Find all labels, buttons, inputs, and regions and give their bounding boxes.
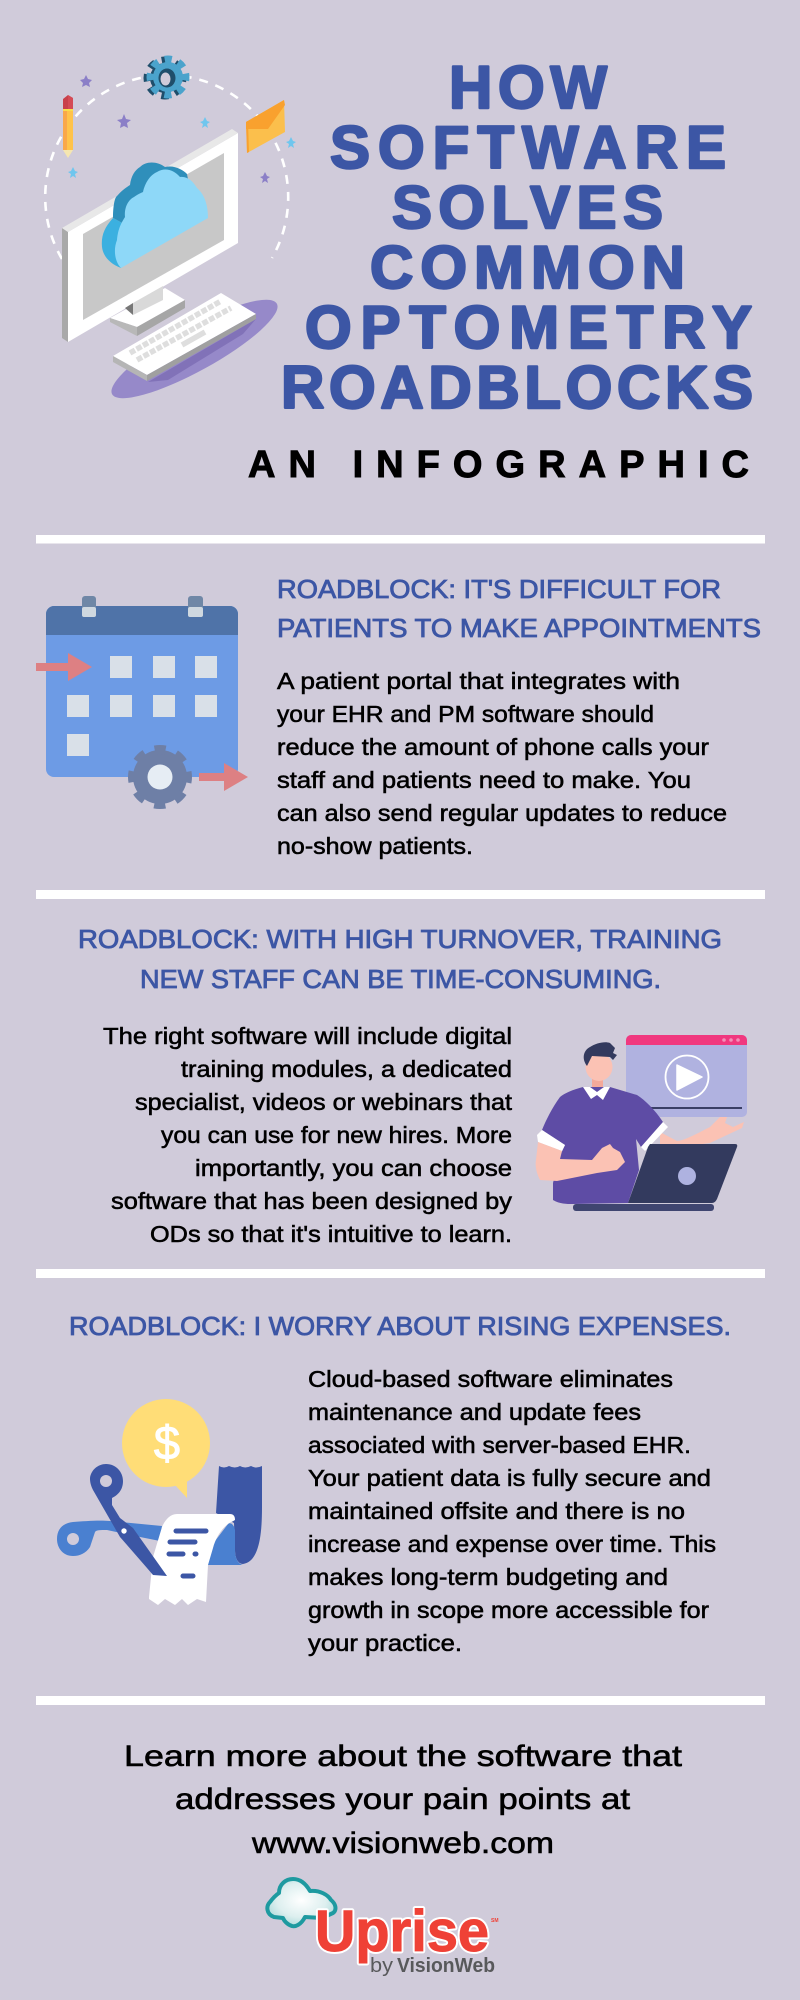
- text block: [103, 1023, 513, 1247]
- title: HOW: [449, 54, 607, 121]
- lower scissor handle: [57, 1521, 162, 1556]
- icon: pencil: [63, 95, 73, 158]
- text block: your practice.: [308, 1630, 462, 1656]
- text block: reduce the amount of phone calls your: [277, 734, 709, 760]
- speech bubble with dollar: [122, 1399, 210, 1498]
- text block: you can use for new hires. More: [161, 1122, 512, 1148]
- text block: growth in scope more accessible for: [308, 1597, 709, 1623]
- byline: VisionWeb: [397, 1955, 495, 1977]
- text block: Your patient data is fully secure and: [308, 1465, 711, 1491]
- text block: The right software will include digital: [103, 1023, 512, 1049]
- call to action: www.visionweb.com: [251, 1827, 554, 1860]
- logo: Uprise by VisionWeb: [267, 1879, 498, 1977]
- icon: envelope: [246, 100, 285, 153]
- text block: your EHR and PM software should: [277, 701, 654, 727]
- stars: [68, 75, 296, 183]
- heading: PATIENTS TO MAKE APPOINTMENTS: [277, 613, 761, 643]
- call to action: [124, 1740, 683, 1860]
- text block: increase and expense over time. This: [308, 1531, 716, 1557]
- title: ROADBLOCKS: [281, 354, 753, 421]
- purple ellipse shadow: [102, 284, 287, 414]
- title: OPTOMETRY: [305, 294, 752, 361]
- illustration: scissors cutting receipt: [57, 1399, 262, 1605]
- upper scissor: [90, 1464, 167, 1576]
- text block: specialist, videos or webinars that: [135, 1089, 513, 1115]
- byline: by: [370, 1955, 393, 1977]
- text block: A patient portal that integrates with: [277, 668, 680, 694]
- keyboard: [113, 293, 256, 381]
- text block: [308, 1366, 716, 1656]
- service mark: SM: [491, 1918, 498, 1924]
- subtitle: AN INFOGRAPHIC: [248, 444, 749, 486]
- video window: [626, 1035, 747, 1117]
- heading: ROADBLOCK: WITH HIGH TURNOVER, TRAINING: [78, 924, 722, 954]
- icon: gear: [128, 745, 192, 809]
- text block: maintenance and update fees: [308, 1399, 641, 1425]
- icon: cloud: [102, 162, 208, 268]
- hair: [584, 1042, 617, 1066]
- heading: ROADBLOCK: IT'S DIFFICULT FOR: [277, 574, 721, 604]
- wordmark: Uprise: [315, 1899, 489, 1964]
- text block: associated with server-based EHR.: [308, 1432, 691, 1458]
- call to action: addresses your pain points at: [175, 1783, 631, 1816]
- heading: NEW STAFF CAN BE TIME-CONSUMING.: [140, 964, 661, 994]
- laptop: [628, 1144, 737, 1203]
- dashed orbit: [45, 75, 288, 259]
- monitor: [62, 129, 238, 342]
- left arm: [536, 1142, 625, 1181]
- illustration: cloud computer: [45, 56, 296, 414]
- icon: calendar: [36, 596, 248, 809]
- stand: [110, 288, 185, 336]
- icon: cloud: [267, 1879, 335, 1926]
- text block: can also send regular updates to reduce: [277, 800, 727, 826]
- text block: training modules, a dedicated: [181, 1056, 512, 1082]
- title: SOLVES: [392, 174, 663, 241]
- ribbon: [216, 1466, 262, 1564]
- panel: expenses: [57, 1311, 731, 1656]
- text block: makes long-term budgeting and: [308, 1564, 668, 1590]
- title: COMMON: [370, 234, 685, 301]
- call to action: Learn more about the software that: [124, 1740, 683, 1773]
- arrow: out: [199, 763, 248, 791]
- title: [281, 54, 753, 421]
- arrow: in: [36, 653, 92, 681]
- heading: [277, 574, 761, 643]
- heading: [78, 924, 722, 994]
- text block: no-show patients.: [277, 833, 473, 859]
- text block: ODs so that it's intuitive to learn.: [150, 1221, 512, 1247]
- title: SOFTWARE: [330, 114, 726, 181]
- text block: software that has been designed by: [111, 1188, 513, 1214]
- speech bubble with dollar: $: [154, 1416, 180, 1469]
- right arm: [660, 1117, 744, 1150]
- neck and head: [592, 1075, 603, 1088]
- text block: staff and patients need to make. You: [277, 767, 691, 793]
- text block: Cloud-based software eliminates: [308, 1366, 673, 1392]
- shirt: [542, 1087, 663, 1204]
- receipt: [149, 1514, 235, 1605]
- icon: gear: [144, 56, 189, 99]
- text block: [277, 668, 727, 859]
- panel: appointments: [36, 574, 761, 859]
- text block: maintained offsite and there is no: [308, 1498, 685, 1524]
- heading: ROADBLOCK: I WORRY ABOUT RISING EXPENSES.: [69, 1311, 731, 1341]
- text block: importantly, you can choose: [195, 1155, 512, 1181]
- illustration: person with laptop and video: [536, 1035, 747, 1211]
- panel: training: [78, 924, 747, 1247]
- wordmark: Uprise: [315, 1899, 489, 1964]
